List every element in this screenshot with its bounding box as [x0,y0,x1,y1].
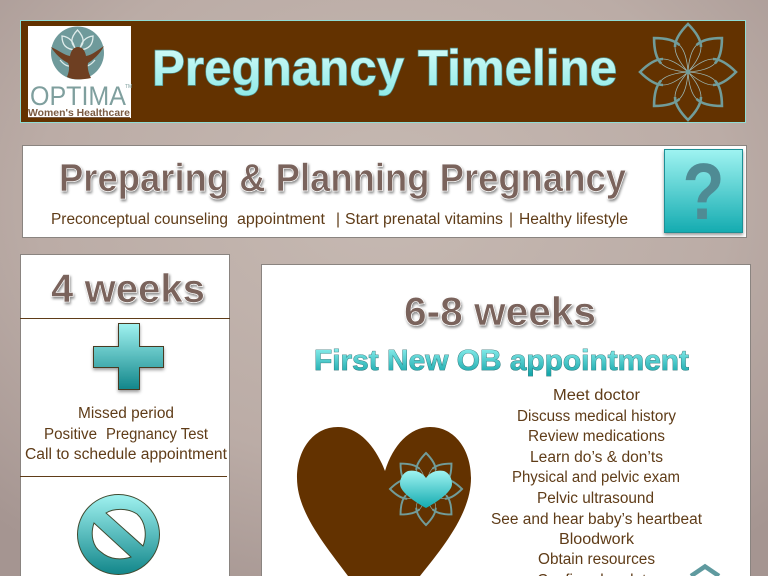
text: appointment checklist: Physical and pelvic exam [512,469,680,486]
text: appointment checklist [491,387,703,576]
logo: Optima Women's Healthcare: Women's Healthcare [28,108,130,119]
text: preconception steps: Preconceptual counseling [51,211,228,228]
panel: 6-8 weeks [262,264,750,576]
text: preconception steps: Healthy lifestyle [519,211,628,228]
heading: 6-8 weeks: 6-8 weeks [404,290,596,334]
icon: question mark box [664,147,742,236]
panel: 4 weeks [20,254,230,576]
text: 4 week checklist [25,405,228,463]
icon: medical cross [94,324,164,390]
text: 4 week checklist: Pregnancy Test [106,426,209,443]
text: 4 week checklist: Positive [44,426,97,443]
text: preconception steps: | [509,211,513,228]
text: appointment checklist: Learn do’s & don’ts [530,449,663,466]
logo: Optima Women's Healthcare [28,26,132,119]
icon: lotus flower [640,24,736,120]
subheading: first new OB appointment: First New OB appointment [314,345,689,377]
text: preconception steps: Start prenatal vitamins [345,211,503,228]
icon: brown heart with lotus [297,427,471,576]
logo: Optima Women's Healthcare: TM [125,84,132,90]
icon: prohibition sign [78,494,160,574]
text: appointment checklist: Discuss medical history [517,408,676,425]
title banner [20,20,746,122]
heading: 4 weeks: 4 weeks [51,267,205,311]
text: appointment checklist: See and hear baby’s heartbeat [491,511,703,528]
text: appointment checklist: Meet doctor [553,387,640,404]
text: preconception steps: appointment [237,211,326,228]
text: appointment checklist: Review medications [528,428,665,445]
icon: question mark box: ? [682,147,724,236]
text: preconception steps [51,211,628,228]
text: 4 week checklist: Missed period [78,405,174,422]
text: appointment checklist: Obtain resources [538,551,655,568]
logo: Optima Women's Healthcare: OPTIMA [30,81,126,111]
text: 4 week checklist: Call to schedule appointment [25,446,228,463]
icon: partial lotus petal [691,566,719,576]
text: appointment checklist: Pelvic ultrasound [537,490,654,507]
text: appointment checklist: Bloodwork [559,531,634,548]
heading: preparing and planning pregnancy: Preparing & Planning Pregnancy [59,157,626,200]
panel: preparing and planning [22,146,746,238]
title text: Pregnancy Timeline [152,40,617,96]
text: preconception steps: | [336,211,340,228]
